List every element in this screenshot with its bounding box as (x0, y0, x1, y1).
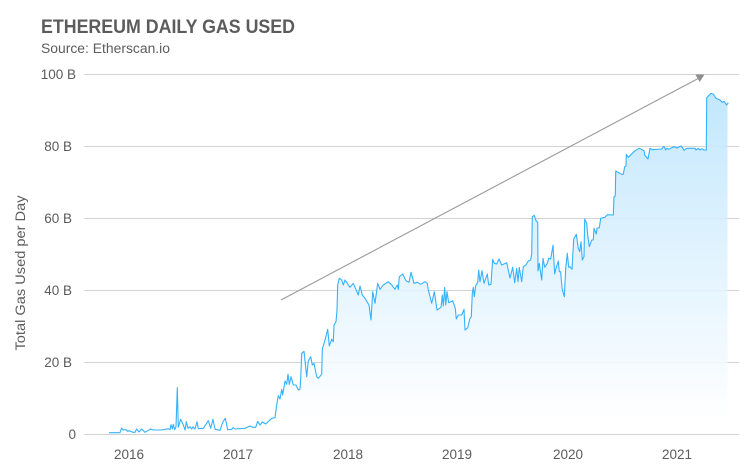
y axis labels: 20 B (44, 355, 72, 370)
x axis labels: 2019 (442, 447, 472, 462)
source note: Source: Etherscan.io (41, 41, 170, 56)
y axis labels: 80 B (44, 139, 72, 154)
x axis labels: 2016 (114, 447, 144, 462)
gridlines (84, 74, 739, 434)
x axis labels: 2020 (553, 447, 583, 462)
trend arrow (281, 74, 704, 300)
x axis labels: 2017 (223, 447, 253, 462)
area fill (277, 93, 728, 434)
y axis labels: 40 B (44, 283, 72, 298)
x axis labels (114, 447, 692, 462)
title: ETHEREUM DAILY GAS USED (41, 17, 295, 38)
x axis labels: 2021 (662, 447, 692, 462)
data line (109, 93, 728, 433)
y axis labels: 0 (68, 427, 76, 442)
y axis labels: 60 B (44, 211, 72, 226)
y axis title: Total Gas Used per Day (13, 195, 28, 350)
y axis labels: 100 B (41, 67, 76, 82)
y axis labels (41, 67, 76, 442)
x axis labels: 2018 (333, 447, 363, 462)
